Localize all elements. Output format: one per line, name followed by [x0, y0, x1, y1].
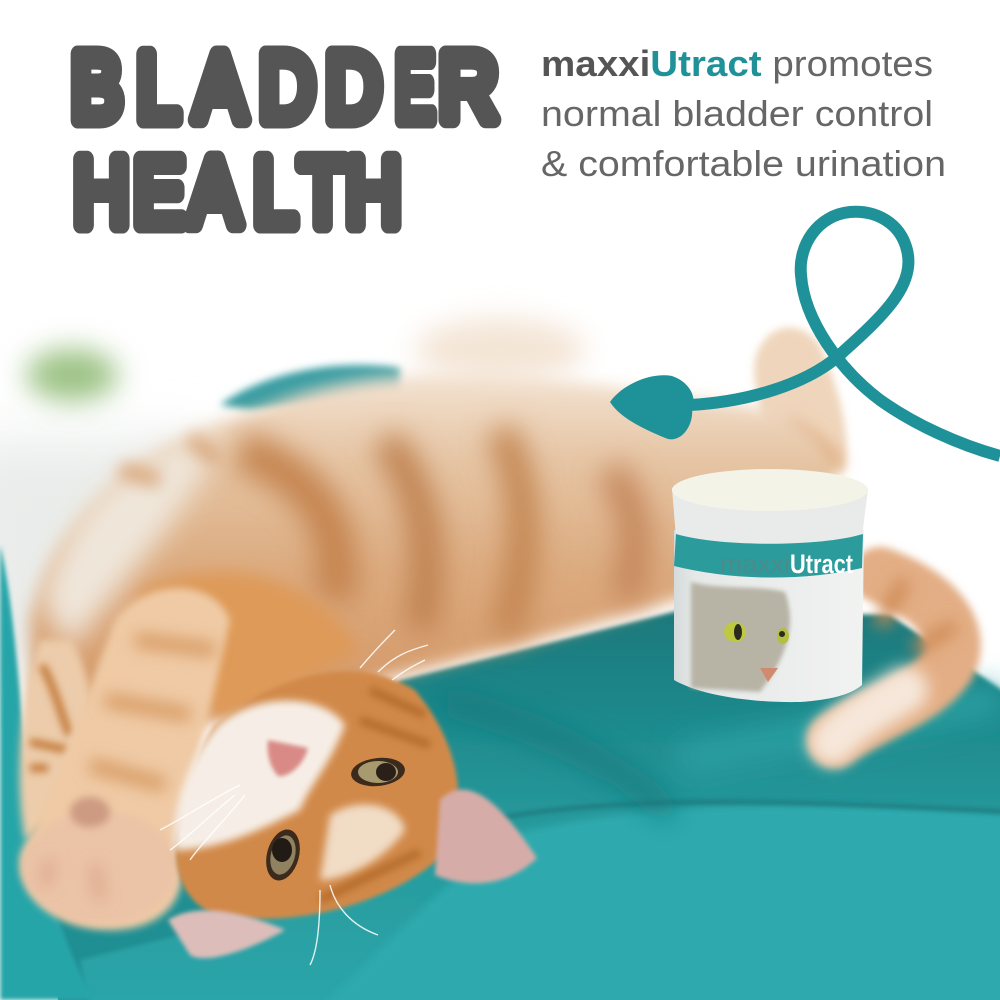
lid	[672, 488, 868, 545]
eye lower	[261, 826, 305, 884]
title: R	[439, 33, 498, 140]
white muzzle	[174, 701, 345, 850]
orange shoulder	[140, 572, 360, 720]
jar label text: maxxi	[720, 549, 790, 579]
back foreleg	[20, 640, 93, 840]
jar label text: Utract	[790, 549, 853, 579]
tail	[835, 575, 953, 740]
description text: maxxiUtract promotes	[541, 43, 933, 84]
teal cushion	[0, 545, 1000, 1000]
cat portrait on jar	[691, 582, 790, 692]
nose	[267, 740, 308, 776]
description text: normal bladder control	[541, 93, 933, 134]
whiskers	[160, 630, 428, 965]
description text: & comfortable urination	[541, 143, 946, 184]
description text	[541, 43, 946, 184]
product jar	[672, 469, 868, 702]
title: HEALTH	[74, 139, 401, 246]
far ear	[435, 790, 537, 883]
hind leg	[754, 328, 847, 475]
near ear	[168, 910, 285, 958]
title: BLADD	[71, 34, 381, 141]
awareness ribbon arrow	[610, 212, 1000, 456]
body	[30, 375, 834, 760]
title	[71, 33, 498, 246]
front foreleg and paw	[20, 588, 230, 930]
eye upper	[350, 755, 406, 789]
title: E	[395, 33, 435, 140]
cat head	[160, 630, 537, 965]
jar body	[674, 530, 864, 702]
jar label text	[720, 549, 853, 579]
ribbon heart tip	[610, 375, 694, 439]
teal label band	[674, 534, 863, 578]
cat photo	[20, 318, 955, 965]
